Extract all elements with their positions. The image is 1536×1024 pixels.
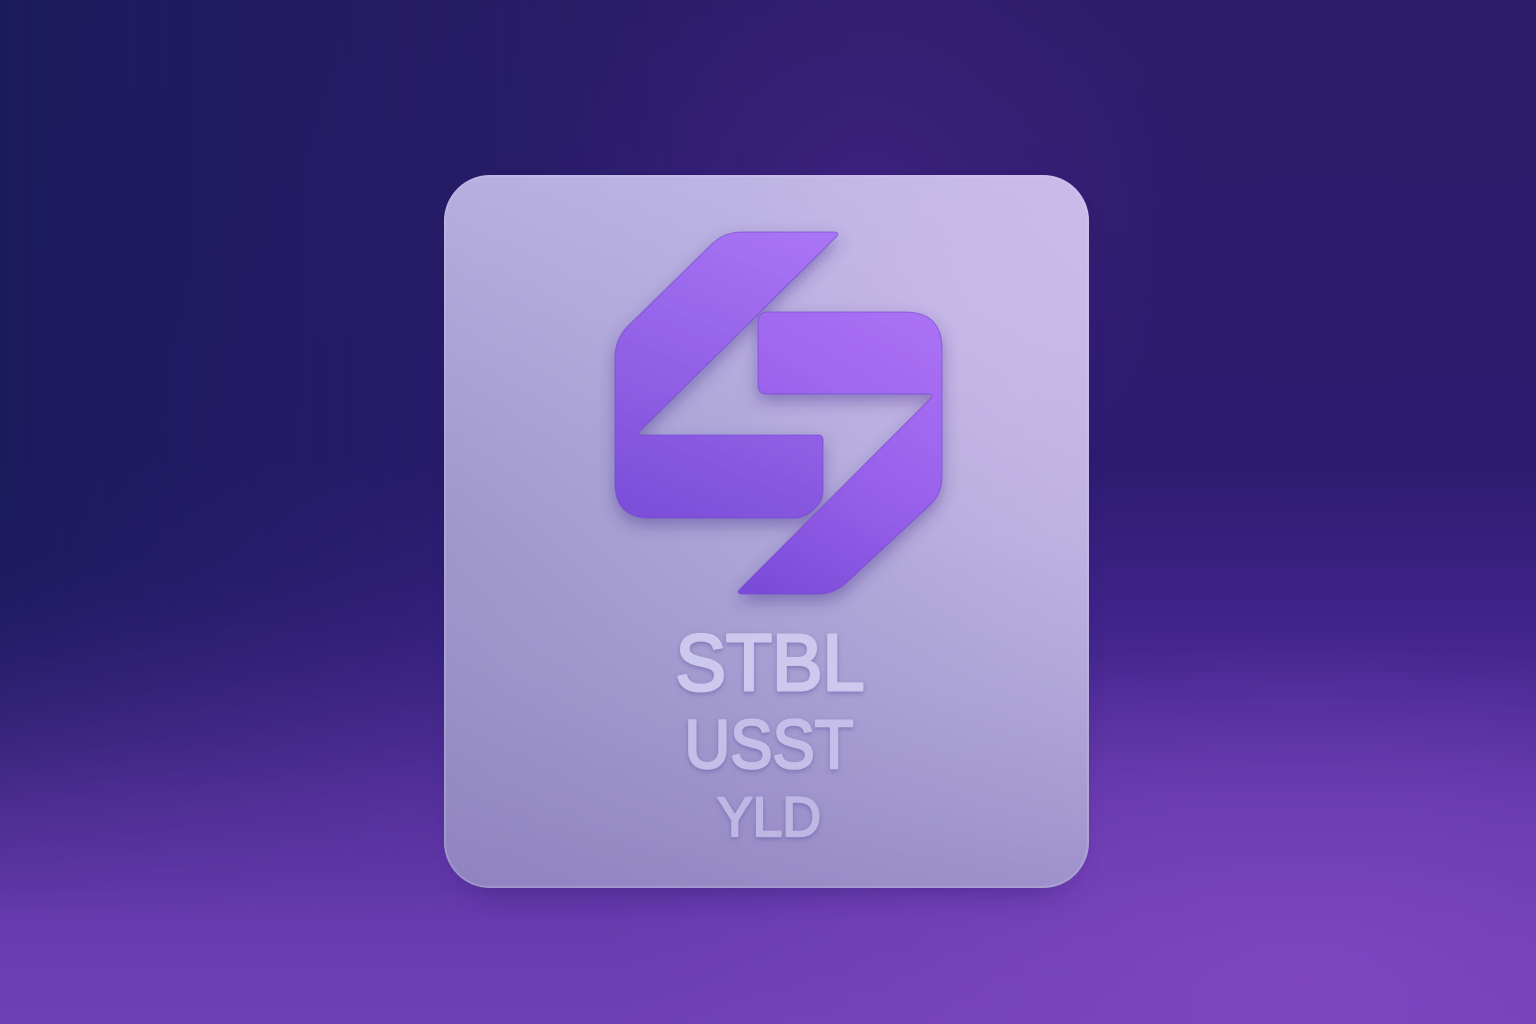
logo right piece — [738, 312, 942, 594]
label: STBL: STBL — [676, 618, 864, 707]
card shadow — [456, 196, 1078, 896]
panel: frosted card — [444, 175, 1089, 888]
logo left piece — [615, 232, 838, 518]
icon: STBL logo mark — [615, 232, 942, 594]
label: YLD: YLD — [717, 785, 821, 848]
label: USST: USST — [684, 706, 854, 783]
